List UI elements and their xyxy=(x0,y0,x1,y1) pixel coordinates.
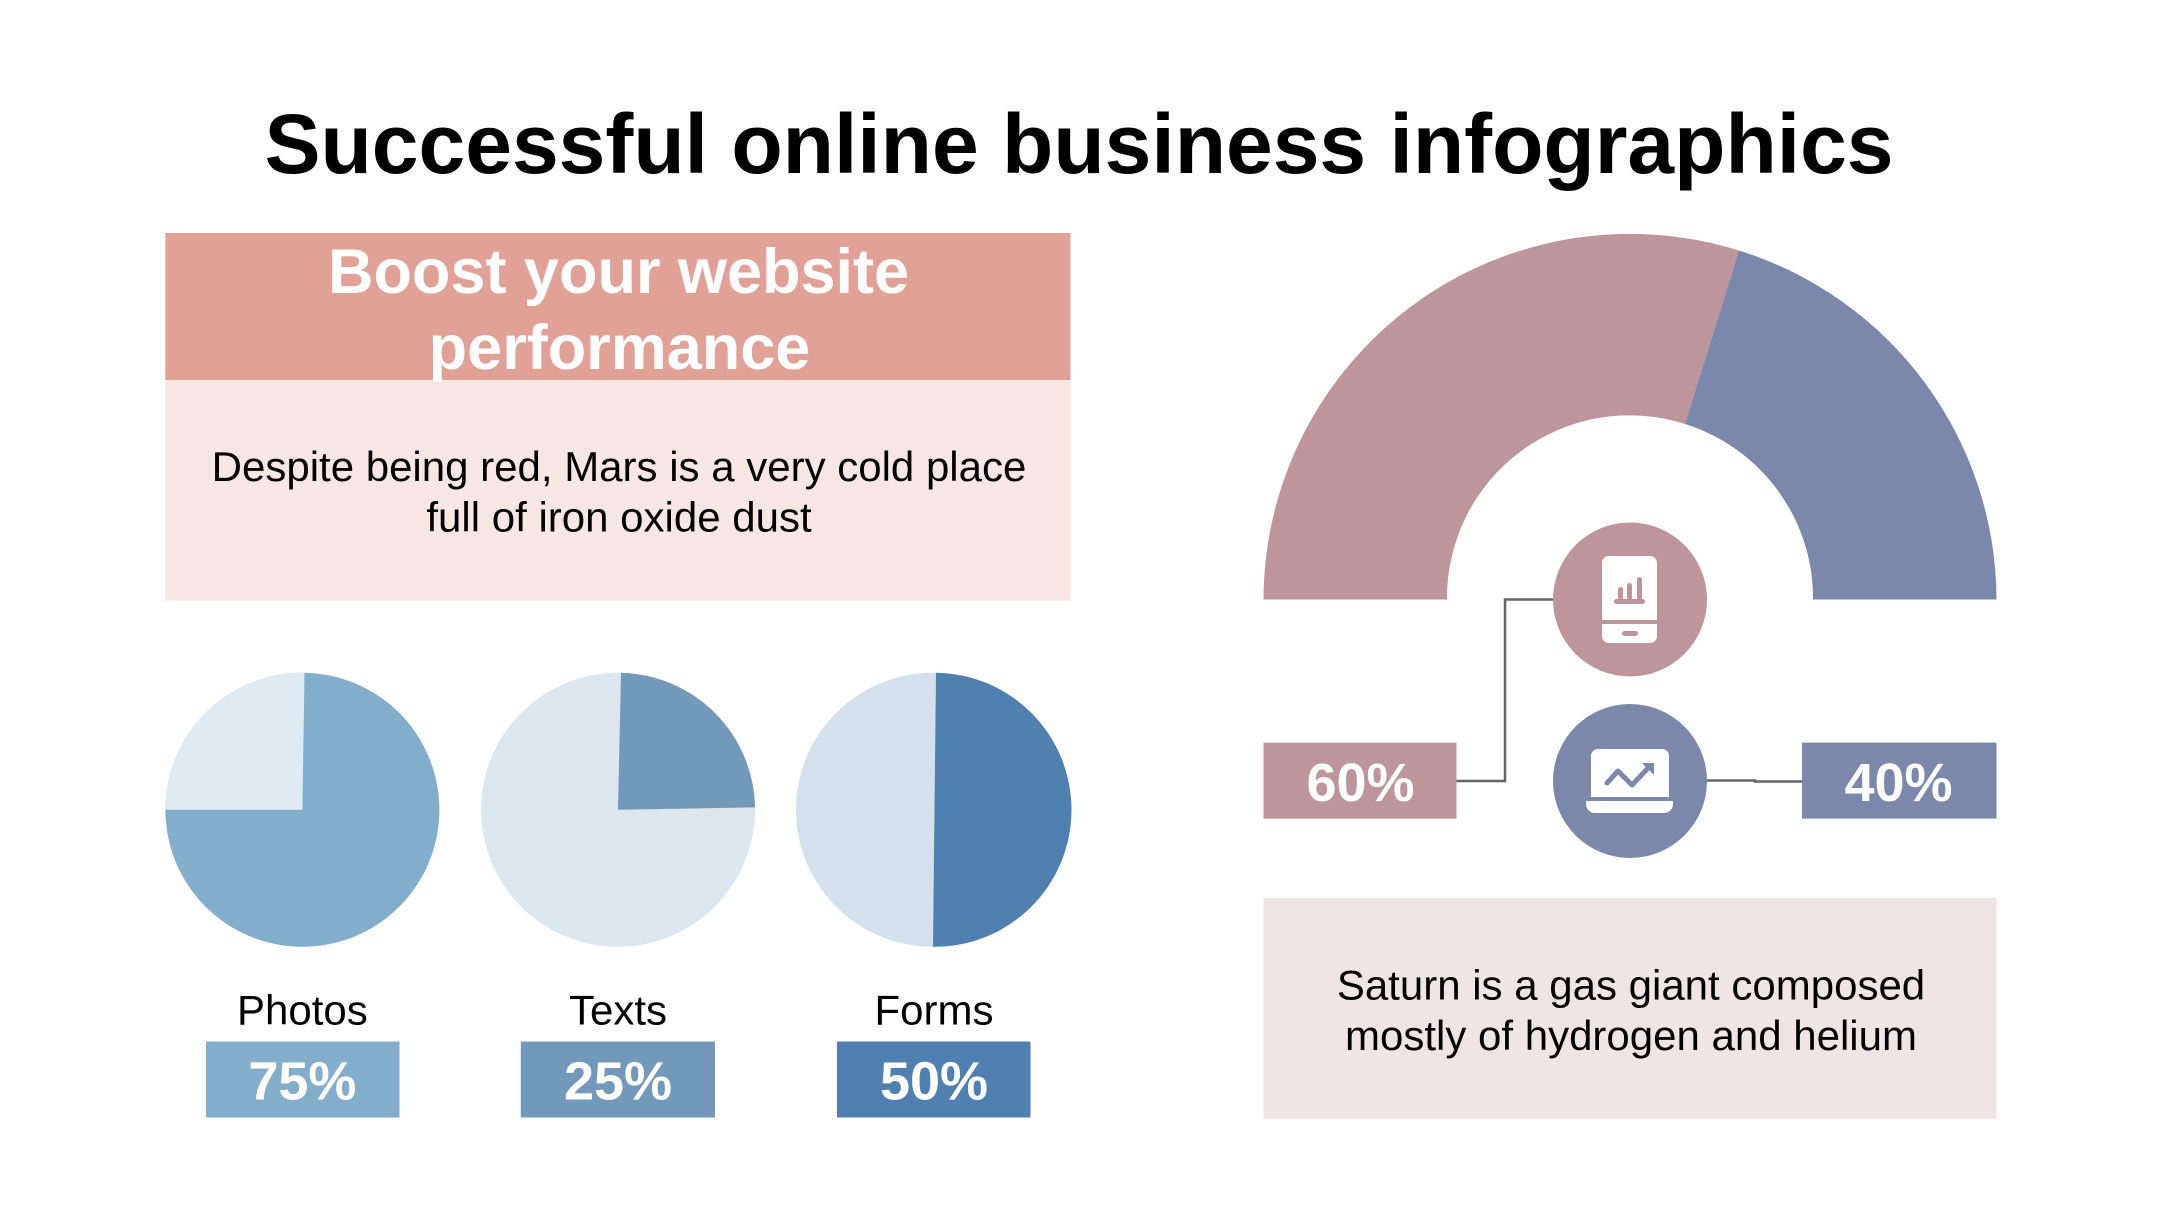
pie chart: texts 25% xyxy=(481,673,755,947)
title: Successful online business infographics xyxy=(264,97,1894,191)
label: photos: Photos xyxy=(237,986,368,1034)
badge: 25% xyxy=(521,1042,715,1118)
badge: 75% xyxy=(206,1042,400,1118)
connector: 60% to phone icon xyxy=(1456,600,1553,781)
badge: 75%: 75% xyxy=(248,1052,356,1112)
semicircle chart: 60% and 40% xyxy=(1264,234,1996,600)
badge: 50%: 50% xyxy=(880,1052,988,1112)
label: forms: Forms xyxy=(874,986,994,1034)
badge: 60% xyxy=(1264,743,1456,819)
badge: 40%: 40% xyxy=(1844,753,1953,813)
badge: 50% xyxy=(837,1042,1030,1118)
badge: 25%: 25% xyxy=(564,1052,672,1112)
connector: laptop icon to 40% xyxy=(1707,780,1802,782)
icon: laptop with growth arrow xyxy=(1553,704,1707,858)
panel body background xyxy=(165,380,1071,601)
panel body text: Despite being red, Mars is a very cold place xyxy=(212,443,1026,490)
pie chart: forms 50% xyxy=(796,673,1072,947)
panel body text: full of iron oxide dust xyxy=(426,494,812,540)
badge: 60%: 60% xyxy=(1306,753,1415,813)
panel heading: performance xyxy=(429,313,810,383)
badge: 40% xyxy=(1802,743,1996,819)
pie chart: photos 75% xyxy=(165,673,439,947)
label: texts: Texts xyxy=(569,986,667,1034)
panel: boost your website xyxy=(165,233,1071,601)
panel: saturn: Saturn is a gas giant composed xyxy=(1337,962,1925,1008)
panel: saturn xyxy=(1264,898,1996,1119)
panel heading: Boost your website xyxy=(328,237,909,307)
panel: saturn: mostly of hydrogen and helium xyxy=(1345,1012,1917,1059)
icon: phone with bar chart xyxy=(1553,522,1707,676)
panel header background xyxy=(165,233,1071,380)
